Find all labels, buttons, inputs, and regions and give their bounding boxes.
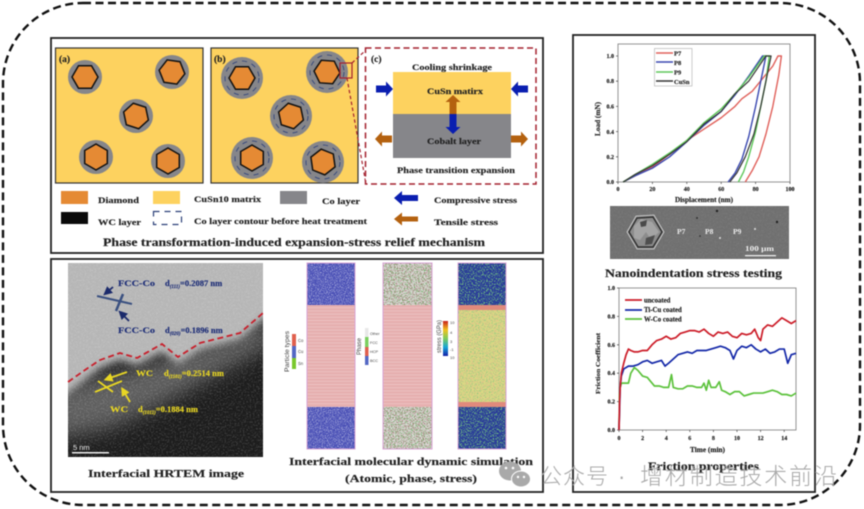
friction coefficient chart: 12: [758, 436, 764, 442]
friction coefficient chart: Time (min): [690, 446, 726, 454]
load-displacement chart: 40: [684, 187, 690, 193]
panel c: stress detail: [366, 48, 536, 184]
load-displacement chart: P8: [674, 60, 682, 67]
heading: nanoindentation: Nanoindentation stress testing: [605, 266, 782, 280]
friction coefficient chart: 4: [665, 436, 668, 442]
legend: CuSn10 matrix: [194, 194, 262, 204]
HRTEM image: WC: [136, 368, 153, 378]
legend: phase: HCP: [370, 350, 378, 354]
friction coefficient chart: 10: [734, 436, 740, 442]
legend: phase: BCC: [370, 359, 378, 363]
friction coefficient chart: 0.2: [608, 400, 615, 406]
legend: phase: Other: [370, 332, 380, 336]
simulation column: phase: [383, 263, 432, 449]
friction coefficient chart: Friction Coefficient: [595, 332, 602, 394]
SEM image of indents: P7: [677, 227, 686, 236]
legend: [61, 191, 518, 227]
heading: HRTEM: Interfacial HRTEM image: [88, 468, 244, 480]
legend: particle types: Particle types: [284, 330, 291, 372]
load-displacement chart: P9: [674, 70, 682, 76]
HRTEM image: =0.2087 nm: [180, 278, 222, 288]
legend: Co layer contour before heat treatment: [194, 216, 367, 226]
load-displacement chart: CuSn: [674, 79, 690, 86]
load-displacement chart: 80: [753, 187, 759, 193]
heading: mechanism: Phase transformation-induced expansion-stress relief mechanism: [103, 237, 485, 249]
legend: particle types: Sn: [298, 361, 304, 366]
watermark: account name: 增材制造技术前沿: [640, 463, 837, 489]
friction coefficient chart: [595, 286, 796, 454]
watermark: wechat icon: [499, 462, 530, 487]
HRTEM image: WC: [110, 404, 128, 414]
panel b: expanded cobalt layers: [211, 48, 358, 183]
legend: stress: 3: [450, 339, 453, 344]
legend: stress: [437, 320, 455, 360]
panel c: stress detail: Cooling shrinkage: [412, 62, 492, 72]
legend: stress: 10: [450, 320, 455, 325]
HRTEM image: =0.2514 nm: [182, 368, 224, 378]
load-displacement chart: 100: [786, 187, 794, 193]
HRTEM image: FCC-Co: [118, 278, 155, 288]
HRTEM image: =0.1884 nm: [156, 404, 198, 414]
heading: simulation: Interfacial molecular dynamic simulation: [289, 456, 533, 468]
load-displacement chart: 60: [718, 187, 724, 193]
legend: stress: stress (GPa): [437, 320, 443, 353]
load-displacement chart: 20: [649, 187, 655, 193]
SEM image of indents: 100 μm: [745, 244, 775, 253]
friction coefficient chart: 0: [618, 436, 620, 442]
legend: stress: 4: [450, 330, 453, 335]
HRTEM image: (020): [170, 332, 181, 337]
SEM image of indents: [610, 206, 789, 259]
HRTEM image: (1011): [143, 411, 156, 416]
HRTEM image: 5 nm: [73, 443, 90, 452]
friction coefficient chart: W-Co coated: [644, 316, 682, 324]
subheading: simulation: (Atomic, phase, stress): [345, 473, 477, 485]
panel b: expanded cobalt layers: (b): [214, 54, 226, 65]
load-displacement chart: P7: [674, 50, 682, 58]
friction coefficient chart: 6: [688, 436, 691, 442]
friction coefficient chart: 0.0: [608, 428, 615, 434]
legend: Tensile stress: [434, 217, 499, 227]
friction coefficient chart: 8: [712, 436, 715, 442]
HRTEM image: =0.1896 nm: [181, 325, 223, 335]
HRTEM image: (1101): [169, 375, 182, 380]
panel c: stress detail: CuSn matirx: [427, 86, 484, 96]
legend: particle types: Cu: [298, 349, 304, 354]
heading: friction: Friction properties: [648, 459, 759, 473]
HRTEM image: (111): [170, 285, 180, 290]
friction coefficient chart: 0.6: [608, 343, 615, 349]
HRTEM image: d: [164, 368, 169, 378]
legend: particle types: Co: [298, 338, 304, 343]
load-displacement chart: [595, 44, 794, 204]
simulation column: stress: [458, 263, 506, 449]
friction coefficient chart: 1.0: [608, 286, 615, 292]
SEM image of indents: P9: [733, 227, 742, 236]
legend: Diamond: [98, 195, 139, 205]
load-displacement chart: 0.4: [606, 130, 614, 136]
load-displacement chart: 0.8: [606, 79, 614, 85]
load-displacement chart: 1.0: [606, 54, 614, 60]
friction coefficient chart: Ti-Cu coated: [644, 307, 682, 314]
watermark: account name: ·: [618, 464, 625, 489]
friction coefficient chart: 2: [641, 436, 644, 442]
watermark: account name: 公众号: [540, 464, 608, 489]
friction coefficient chart: 14: [781, 436, 787, 442]
legend: particle types: [284, 330, 304, 372]
panel a: coated diamonds in matrix: [56, 48, 203, 183]
load-displacement chart: 0.2: [606, 155, 614, 161]
load-displacement chart: 0.0: [606, 180, 614, 186]
HRTEM image: FCC-Co: [118, 325, 155, 335]
panel c: stress detail: Phase transition expansion: [397, 165, 515, 175]
simulation column: atomic: [307, 263, 355, 449]
legend: Co layer: [322, 196, 360, 206]
panel a: coated diamonds in matrix: (a): [59, 54, 70, 65]
watermark: account name: [540, 463, 837, 489]
legend: phase: [357, 328, 380, 365]
SEM image of indents: P8: [705, 227, 714, 236]
legend: Compressive stress: [434, 195, 518, 205]
panel: phase transformation mechanism: [51, 38, 543, 253]
legend: WC layer: [98, 217, 141, 227]
zoom indicator from panel b to panel c: [340, 50, 366, 184]
load-displacement chart: 0.6: [606, 104, 614, 110]
HRTEM image: [67, 262, 264, 458]
friction coefficient chart: 0.8: [608, 314, 615, 320]
legend: phase: Phase: [357, 337, 363, 355]
HRTEM image: d: [138, 404, 143, 414]
HRTEM image: d: [165, 325, 170, 335]
panel: mechanical tests: [573, 35, 815, 492]
friction coefficient chart: 0.4: [608, 371, 615, 377]
load-displacement chart: 0: [616, 187, 620, 193]
friction coefficient chart: uncoated: [644, 298, 671, 304]
legend: stress: -1: [450, 347, 454, 352]
load-displacement chart: Displacement (nm): [675, 197, 733, 204]
panel: interface characterisation: [40, 240, 543, 492]
legend: phase: FCC: [370, 341, 378, 345]
load-displacement chart: Load (mN): [595, 102, 602, 136]
legend: stress: 10: [450, 355, 455, 360]
panel c: stress detail: (c): [371, 54, 382, 65]
HRTEM image: d: [165, 278, 170, 288]
panel c: stress detail: Cobalt layer: [427, 136, 481, 146]
